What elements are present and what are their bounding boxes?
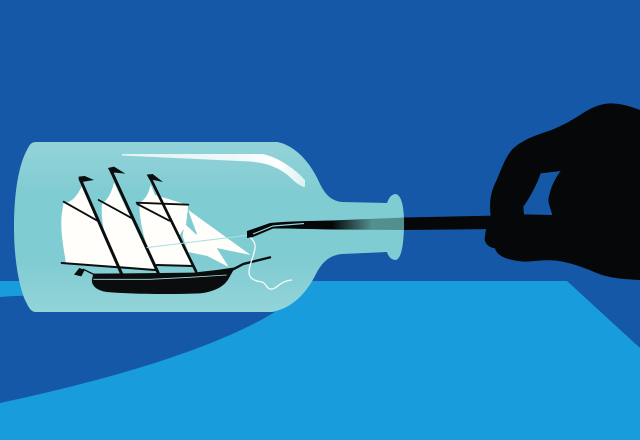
tool handle — [404, 216, 500, 230]
jib gap — [189, 212, 197, 235]
flag: main — [108, 167, 125, 174]
thread — [247, 235, 292, 289]
stern rail — [83, 269, 95, 275]
ship — [61, 167, 270, 294]
bottle glass — [14, 142, 404, 312]
sail: jibs — [183, 210, 251, 267]
hand silhouette — [485, 103, 640, 280]
table surface — [0, 281, 640, 440]
sail: mizzen — [61, 187, 117, 266]
tweezers slit — [253, 224, 304, 234]
tweezers upper arm and shaft — [247, 218, 404, 238]
tweezers inside bottle — [247, 218, 404, 238]
mizzen mast — [80, 179, 122, 274]
main mast — [112, 172, 159, 274]
bottle — [14, 142, 404, 312]
hull stripe — [93, 275, 227, 279]
fore mast — [149, 176, 196, 271]
sail: fore — [139, 185, 194, 267]
booms — [62, 263, 193, 270]
flags — [74, 167, 163, 276]
masts and yards — [62, 172, 270, 275]
sail: main — [102, 183, 155, 269]
flag: fore — [147, 174, 163, 182]
bottle shadow — [0, 296, 275, 403]
flag: mizzen — [79, 176, 94, 183]
sails — [61, 183, 251, 269]
rigging line — [147, 235, 253, 248]
gaffs — [64, 200, 188, 221]
hull — [92, 267, 235, 294]
bowsprit — [227, 257, 270, 273]
bottle highlight — [122, 154, 305, 187]
stern pennant — [74, 268, 85, 276]
